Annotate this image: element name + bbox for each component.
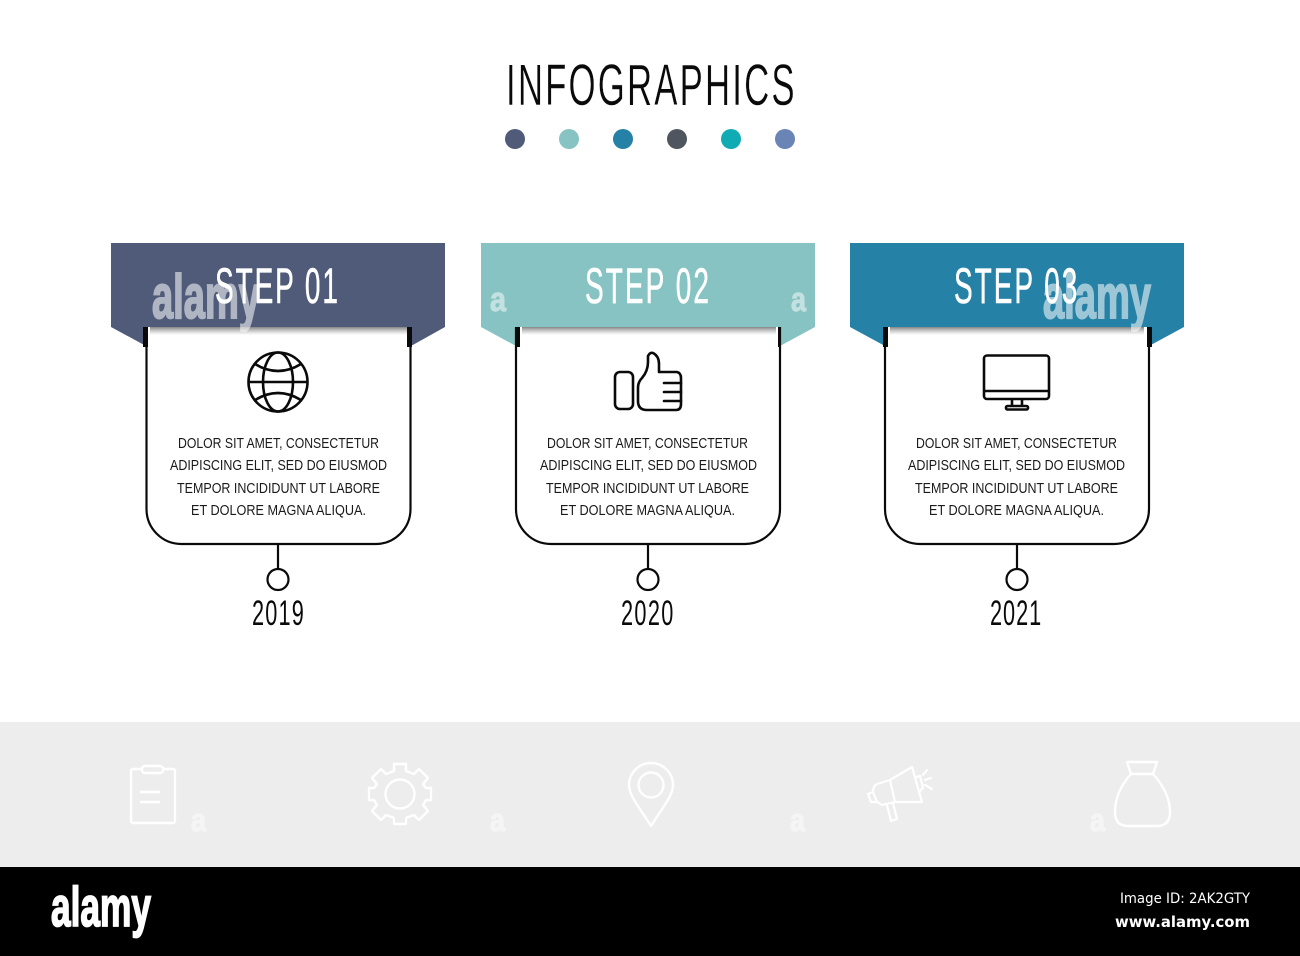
icon: megaphone — [868, 767, 932, 821]
watermark letters: a — [1090, 802, 1105, 838]
watermark letters: a — [790, 802, 805, 838]
text block: ADIPISCING ELIT, SED DO EIUSMOD — [170, 458, 387, 474]
heading: step 02: STEP 02 — [585, 257, 711, 314]
heading: step 03: STEP 03 — [954, 257, 1079, 314]
card: step 02 — [516, 327, 780, 544]
text block: TEMPOR INCIDIDUNT UT LABORE — [177, 481, 380, 497]
icon: monitor — [984, 356, 1049, 410]
panel: icon strip — [0, 722, 1300, 867]
text block — [908, 436, 1125, 519]
year: 2019 — [252, 595, 305, 633]
card: step 01 — [146, 327, 410, 544]
watermark: a — [490, 281, 507, 319]
watermark: alamy — [152, 263, 260, 332]
banner: step 01 — [111, 243, 445, 346]
icon: thumbs up — [615, 353, 681, 410]
icon: globe — [248, 352, 308, 412]
timeline marker — [1006, 544, 1028, 590]
image id: Image ID: 2AK2GTY — [1120, 891, 1250, 907]
year: 2020 — [621, 595, 675, 633]
watermark letters: a — [490, 802, 505, 838]
year: 2021 — [990, 595, 1042, 633]
title: INFOGRAPHICS — [506, 54, 797, 118]
text block: ET DOLORE MAGNA ALIQUA. — [929, 503, 1104, 519]
text block: DOLOR SIT AMET, CONSECTETUR — [916, 436, 1117, 452]
text block: DOLOR SIT AMET, CONSECTETUR — [547, 436, 748, 452]
timeline marker — [638, 544, 658, 590]
text block: DOLOR SIT AMET, CONSECTETUR — [178, 436, 379, 452]
footer url: www.alamy.com — [1115, 913, 1250, 931]
text block: TEMPOR INCIDIDUNT UT LABORE — [546, 481, 749, 497]
footer bar — [0, 867, 1300, 956]
icon: gear — [369, 764, 431, 824]
watermark letters — [191, 802, 1105, 838]
banner: step 02 — [481, 243, 815, 346]
footer logo: alamy — [51, 875, 151, 938]
text block: ADIPISCING ELIT, SED DO EIUSMOD — [908, 458, 1125, 474]
icon: location pin — [629, 763, 673, 826]
icon: money bag — [1115, 762, 1170, 826]
text block: ADIPISCING ELIT, SED DO EIUSMOD — [540, 458, 757, 474]
text block: ET DOLORE MAGNA ALIQUA. — [560, 503, 735, 519]
watermark: alamy — [1043, 263, 1151, 332]
panel: step 02 — [481, 243, 815, 633]
card: step 03 — [885, 327, 1149, 544]
timeline marker — [268, 544, 288, 590]
text block: ET DOLORE MAGNA ALIQUA. — [191, 503, 366, 519]
watermark: a — [791, 281, 807, 319]
text block: TEMPOR INCIDIDUNT UT LABORE — [915, 481, 1118, 497]
watermark — [490, 281, 807, 319]
text block — [540, 436, 757, 519]
colour dots row — [505, 129, 795, 149]
panel: step 03 — [850, 243, 1184, 633]
panel: step 01 — [111, 243, 445, 633]
text block — [170, 436, 387, 519]
watermark letters: a — [191, 802, 206, 838]
banner: step 03 — [850, 243, 1184, 346]
heading: step 01: STEP 01 — [215, 257, 340, 314]
icon: clipboard — [131, 766, 175, 823]
